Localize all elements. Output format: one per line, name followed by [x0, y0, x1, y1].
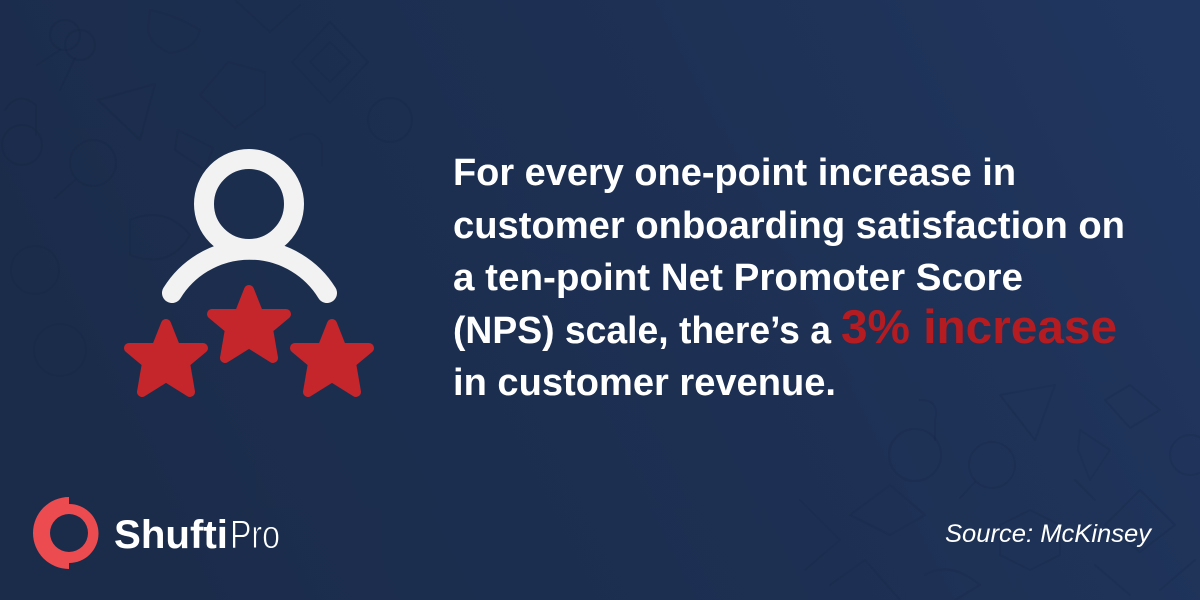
logo wordmark — [114, 513, 280, 557]
user shoulders — [172, 250, 327, 293]
logo: Shufti Pro — [33, 497, 280, 569]
statistic statement: a ten-point Net Promoter Score — [453, 257, 1023, 299]
source credit: Source: McKinsey — [945, 520, 1153, 548]
statistic statement: For every one-point increase in — [453, 152, 1016, 194]
statistic statement: (NPS) scale, there’s a — [453, 310, 832, 352]
centre star — [212, 290, 286, 358]
left star — [129, 324, 203, 392]
right star — [295, 324, 369, 392]
statistic statement — [453, 152, 1125, 404]
user head — [204, 159, 294, 249]
logo mark — [33, 497, 98, 569]
logo wordmark: Shufti — [114, 513, 228, 557]
icon: user with three rating stars — [129, 159, 369, 392]
statistic statement: in customer revenue. — [453, 362, 836, 404]
logo wordmark: Pro — [230, 513, 280, 557]
statistic statement: 3% increase — [841, 300, 1117, 353]
statistic statement: customer onboarding satisfaction on — [453, 205, 1125, 247]
